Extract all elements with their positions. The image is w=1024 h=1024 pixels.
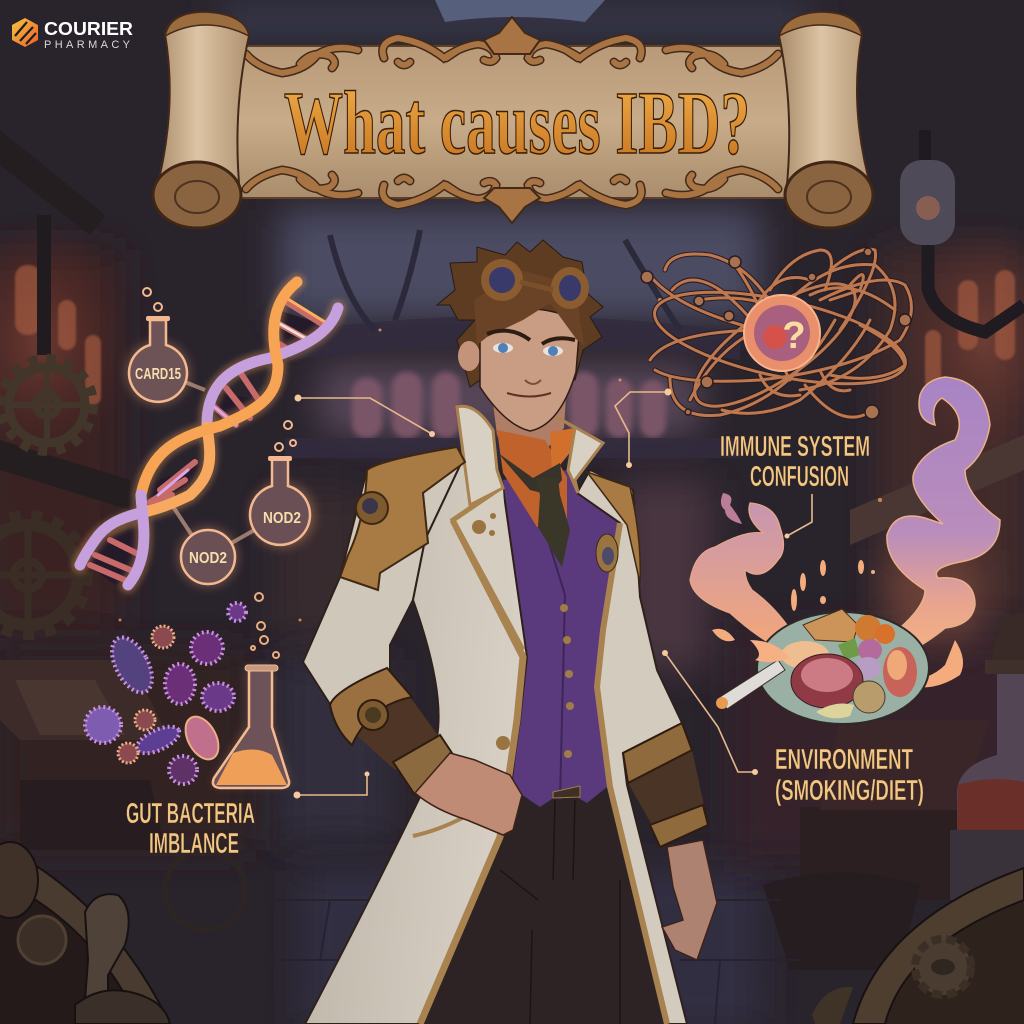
logo text: COURIER: [44, 19, 133, 39]
scroll roller left: [155, 12, 249, 195]
gear: left lower: [0, 515, 88, 635]
pink bacterium: [179, 711, 225, 765]
purple smoke right: [885, 377, 1000, 660]
label: gut bacteria: GUT BACTERIA: [126, 798, 255, 830]
title banner scroll: [153, 12, 873, 228]
connector: bacteria: [294, 772, 370, 798]
banner ornaments: [246, 38, 778, 205]
shoulder armour right: [587, 472, 640, 583]
collar right: [557, 417, 603, 493]
coat left lapel: [453, 488, 515, 640]
trousers: [420, 795, 667, 1024]
label: gut bacteria: [126, 798, 255, 860]
label: immune system: CONFUSION: [750, 461, 849, 493]
immune system tangle: [641, 248, 913, 427]
collar left: [457, 406, 503, 505]
neck: [492, 395, 566, 470]
connector: immune to flames: [784, 494, 812, 538]
tangled nerves: [647, 249, 913, 427]
cigarette tip: [716, 697, 728, 709]
scroll roller right: [779, 12, 873, 195]
coat left body: [305, 455, 527, 1024]
gauntlet right: [623, 723, 708, 847]
roller right end: [785, 162, 873, 228]
coat pocket: [413, 816, 466, 836]
environment: smoke, food, cigarette: [690, 377, 1000, 724]
small flame top left: [721, 493, 742, 524]
coat right: [577, 470, 687, 1024]
food plate: [757, 612, 929, 724]
mouth: [507, 393, 551, 396]
flames over plate: [750, 640, 790, 662]
roller left end: [153, 162, 241, 228]
bacteria cells: [85, 603, 246, 784]
flask: NOD2 right: [249, 456, 315, 548]
banner parchment: [232, 46, 792, 198]
coat buttons: [472, 513, 510, 750]
label: immune system: [720, 431, 870, 493]
ornament bottom fan: [484, 188, 540, 223]
gut bacteria group: [85, 593, 290, 788]
title: What causes IBD?: [284, 74, 750, 173]
character: scientist: [303, 240, 717, 1024]
food items: [781, 609, 917, 718]
shoulder armour left: [340, 447, 465, 590]
question mark: ?: [782, 315, 806, 357]
ear: [458, 341, 480, 371]
lantern right: [900, 130, 1024, 332]
glowing core: [744, 295, 820, 371]
cigarette: [720, 660, 785, 709]
label: environment: [775, 744, 924, 807]
face: [480, 309, 580, 431]
gear: left upper: [1, 359, 93, 451]
connector: DNA: [294, 394, 435, 437]
shirt and tie: [497, 428, 576, 567]
connector: environment: [662, 650, 758, 775]
flask: CARD15: CARD15: [135, 366, 181, 383]
goggles: [485, 263, 585, 305]
rising bubbles: [251, 593, 279, 658]
label: environment: (SMOKING/DIET): [775, 775, 924, 807]
DNA helix: [80, 282, 338, 585]
logo mark: [12, 18, 38, 47]
tangle end nodes: [641, 248, 911, 419]
flask: NOD2 left: [178, 527, 238, 587]
logo: [12, 18, 133, 51]
flame left: [690, 503, 800, 650]
connector: immune: [615, 388, 672, 468]
machine: bottom left: [0, 842, 170, 1024]
flask bubbles: [143, 288, 296, 451]
hair back: [437, 240, 603, 387]
belt: [553, 786, 580, 798]
hair fringe: [474, 270, 584, 345]
label: environment: ENVIRONMENT: [775, 744, 913, 776]
flask: NOD2 right: NOD2: [263, 510, 301, 527]
vest: [503, 470, 620, 807]
label: gut bacteria: IMBLANCE: [149, 828, 239, 860]
flask connectors: [172, 382, 258, 545]
peach bacteria: [118, 626, 174, 763]
roller left top cap: [165, 12, 249, 36]
DNA and gene flasks: [80, 282, 338, 587]
flask: NOD2 left: NOD2: [189, 550, 227, 567]
roller right top cap: [779, 12, 862, 36]
coat left trim: [420, 520, 523, 1024]
eyes: [493, 343, 563, 356]
eyebrows: [487, 331, 575, 344]
label: immune system: IMMUNE SYSTEM: [720, 431, 870, 463]
flask: right red: [950, 612, 1024, 900]
flask: CARD15: [126, 316, 190, 405]
coat left arm: [303, 455, 465, 712]
flask: beaker: [212, 665, 290, 788]
goggle bridge: [520, 282, 553, 290]
brooch: [596, 534, 618, 572]
embers: [712, 560, 875, 641]
logo: PHARMACY: [44, 39, 131, 51]
machine: bottom right: [812, 868, 1024, 1024]
ornament top fan: [484, 17, 540, 54]
coat right trim: [597, 523, 667, 1024]
nose: [525, 380, 541, 384]
hand at hip: [415, 753, 522, 835]
small flame right: [900, 640, 963, 688]
hand right: [662, 840, 717, 960]
gauntlet left: [330, 668, 452, 795]
